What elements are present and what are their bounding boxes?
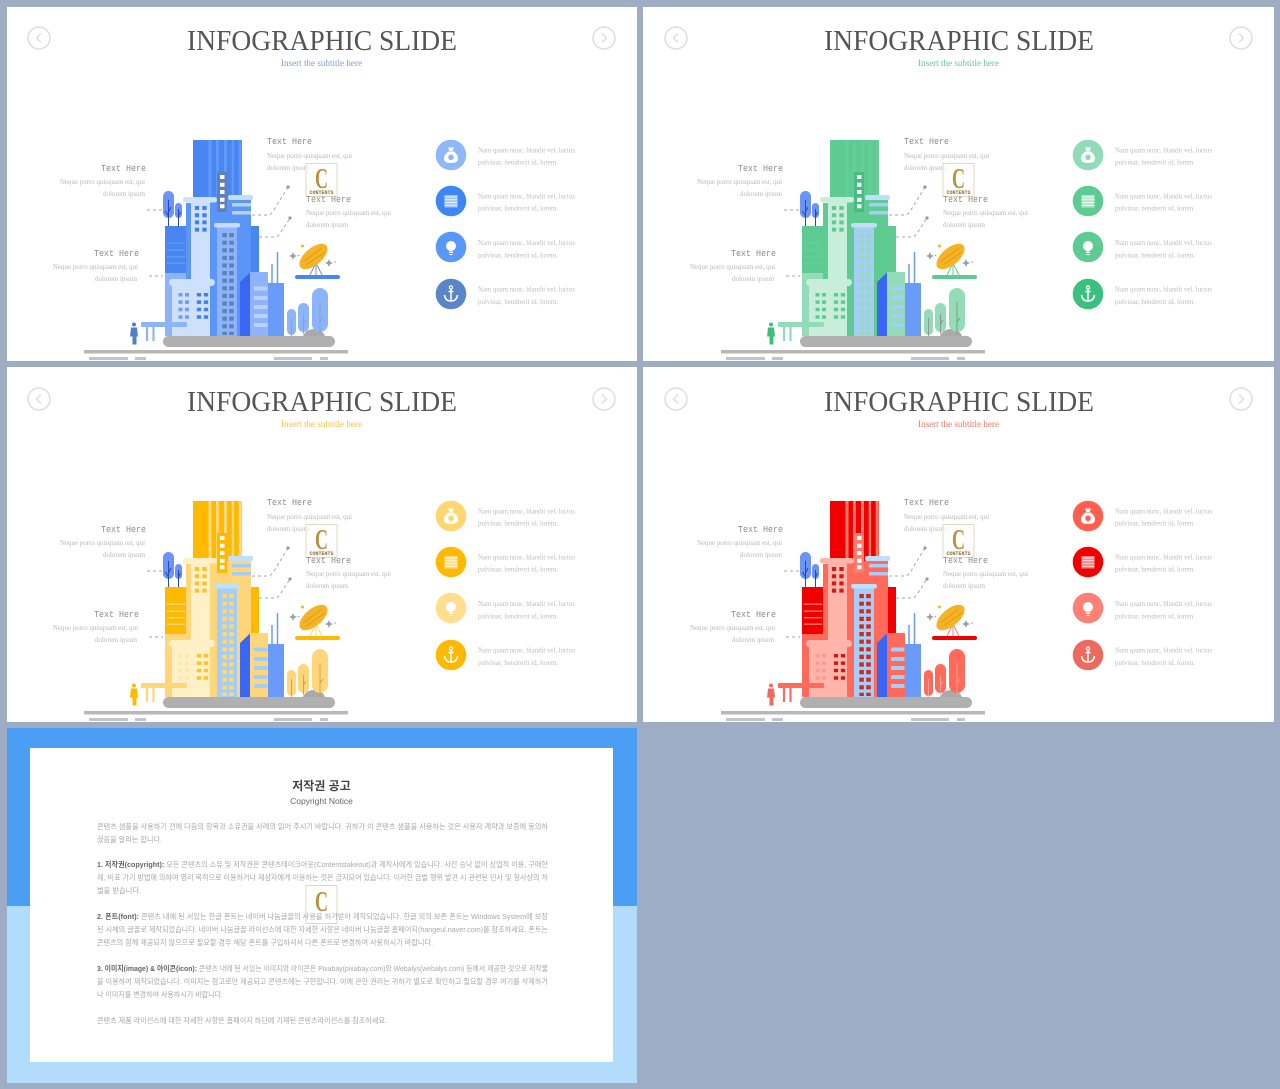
callout: right middle: Neque porro quisquam est, qui [306, 209, 391, 217]
text block: copyright: 벌을 받습니다. [97, 885, 141, 895]
callout: left bottom: Neque porro quisquam est, qui [690, 263, 775, 271]
text block: image and icon: 을 이용하여 제작되었습니다. 이미지는 참고로만 제공되고 콘텐츠에는 구현합니다. 이에 관한 권리는 귀하가 별도로 확인하고 필요할 경우 여기를 삭제하거 [97, 976, 548, 986]
text block: image and icon: 나 이미지를 변경하여 사용하시기 바랍니다. [97, 989, 223, 999]
list item: stack [436, 186, 575, 216]
callout: left bottom: dolorem ipsum [95, 275, 138, 283]
list item: money [1073, 140, 1212, 170]
panel: copyright notice [7, 728, 637, 1083]
watermark logo [306, 886, 337, 924]
text block: image and icon: 3. 이미지(image) & 아이콘(icon): 콘텐츠 내에 된 서있는 이미지와 아이콘은 Pixabay(pixabay.com)와 Webalys(webalys.com) 등에서 제공한 것으로 저작물 [97, 963, 548, 973]
subtitle: Insert the subtitle here [918, 58, 999, 68]
heading: copyright notice: 저작권 공고 [292, 778, 351, 793]
callout: left top: Neque porro quisquam est, qui [697, 539, 782, 547]
callout: left top [60, 525, 146, 559]
callout: left top: Text Here [738, 164, 783, 174]
list item: money: Nam quam nunc, blandit vel, luctus [478, 146, 575, 154]
list item: stack: pulvinar, hendrerit id, lorem. [478, 566, 558, 574]
subtitle: Insert the subtitle here [918, 419, 999, 429]
callout: left top: dolorem ipsum [103, 551, 146, 559]
list item: anchor [436, 640, 575, 670]
list item: bulb [436, 593, 575, 623]
callout: right top [267, 498, 352, 533]
list item: anchor: Nam quam nunc, blandit vel, luctus [1115, 646, 1212, 654]
watermark logo: C [952, 164, 965, 195]
callout: right top: Text Here [904, 498, 949, 508]
callout: left top [697, 525, 783, 559]
list item: bulb: pulvinar, hendrerit id, lorem. [478, 252, 558, 260]
callout: right middle: Text Here [943, 556, 988, 566]
text block: intro [97, 821, 548, 844]
list item: stack: pulvinar, hendrerit id, lorem. [1115, 566, 1195, 574]
list item: money: pulvinar, hendrerit id, lorem. [478, 158, 558, 166]
icon: previous arrow [665, 388, 687, 410]
callout: right middle: dolorem ipsum [943, 221, 986, 229]
list item: bulb: pulvinar, hendrerit id, lorem. [1115, 612, 1195, 620]
callout: left bottom: Neque porro quisquam est, qui [53, 263, 138, 271]
illustration: blue city [84, 140, 348, 360]
panel: red slide [643, 367, 1274, 722]
callout: left top: dolorem ipsum [740, 190, 783, 198]
text block: copyright: 1. 저작권(copyright): 모든 콘텐츠의 소유 및 저작권은 콘텐츠테이크아웃(Contentstakeout)과 제작사에게 있습니다. 사전 승낙 없이 상업적 이용, 구매한 [97, 859, 548, 869]
callout: right top [267, 137, 352, 172]
callout: right top [904, 137, 989, 172]
text block: font [97, 911, 548, 947]
text block: license note: 콘텐츠 제품 라이선스에 대한 자세한 사항은 홈페이지 하단에 기재된 콘텐츠라이선스를 참조하세요. [97, 1015, 387, 1025]
title: INFOGRAPHIC SLIDE [824, 387, 1094, 418]
list item: anchor: pulvinar, hendrerit id, lorem. [478, 298, 558, 306]
list item: bulb: Nam quam nunc, blandit vel, luctus [1115, 600, 1212, 608]
watermark logo [943, 164, 974, 196]
callout: right middle: Text Here [943, 195, 988, 205]
watermark logo: CONTENTS [946, 551, 971, 557]
callout: left bottom: dolorem ipsum [95, 636, 138, 644]
text block: copyright: 제, 비표 가기 방법에 의하여 영리 목적으로 이용하거나 제삼자에게 이용하는 것은 금지되어 있습니다. 이러한 금벌 행위 발견 시 관련된 민사 및 형사상의 처 [97, 872, 548, 882]
list item: anchor [1073, 640, 1212, 670]
text block: intro: 콘텐츠 샘플을 사용하기 전에 다음의 항목과 소유권을 사례의 읽어 주시기 바랍니다. 귀하가 이 콘텐츠 샘플을 사용하는 것은 사용자 계약과 보증에 동의하 [97, 821, 548, 831]
list item: money: Nam quam nunc, blandit vel, luctus [1115, 146, 1212, 154]
list item: anchor [1073, 279, 1212, 309]
callout: right top: Neque porro quisquam est, qui [267, 513, 352, 521]
icon: next arrow [1230, 27, 1252, 49]
icon: previous arrow [28, 27, 50, 49]
callout: right middle: dolorem ipsum [943, 582, 986, 590]
callout: left top: Neque porro quisquam est, qui [60, 539, 145, 547]
text block: copyright [97, 859, 548, 895]
callout: left top: Text Here [101, 164, 146, 174]
list item: bulb: Nam quam nunc, blandit vel, luctus [1115, 239, 1212, 247]
list item: stack [1073, 547, 1212, 577]
watermark logo: C [315, 887, 328, 918]
callout: left bottom [690, 249, 776, 283]
list item: money: Nam quam nunc, blandit vel, luctus [478, 508, 575, 516]
title: INFOGRAPHIC SLIDE [824, 26, 1094, 57]
list item: bulb: pulvinar, hendrerit id, lorem. [478, 612, 558, 620]
illustration: red city [721, 501, 985, 721]
subtitle: Insert the subtitle here [281, 419, 362, 429]
callout: left bottom: dolorem ipsum [732, 275, 775, 283]
list item: stack: Nam quam nunc, blandit vel, luctus [478, 554, 575, 562]
list item: bulb: Nam quam nunc, blandit vel, luctus [478, 600, 575, 608]
callout: left bottom: dolorem ipsum [732, 636, 775, 644]
watermark logo: C [315, 164, 328, 195]
callout: left bottom: Text Here [731, 610, 776, 620]
callout: right top: Neque porro quisquam est, qui [904, 152, 989, 160]
watermark logo [306, 524, 337, 558]
list item: money [1073, 501, 1212, 531]
callout: left top: Neque porro quisquam est, qui [697, 178, 782, 186]
panel: blue slide [7, 7, 637, 361]
callout: left top [60, 164, 146, 198]
list item: money: pulvinar, hendrerit id, lorem. [1115, 520, 1195, 528]
callout: left top: Text Here [738, 525, 783, 535]
callout: right top: dolorem ipsum [904, 164, 947, 172]
text block: intro: 셨음을 알리는 합니다. [97, 835, 162, 844]
callout: left top: dolorem ipsum [740, 551, 783, 559]
subtitle: Insert the subtitle here [281, 58, 362, 68]
list item: stack: pulvinar, hendrerit id, lorem. [478, 204, 558, 212]
callout: right middle: Neque porro quisquam est, qui [943, 209, 1028, 217]
callout: right middle: Neque porro quisquam est, qui [943, 570, 1028, 578]
list item: anchor: Nam quam nunc, blandit vel, luctus [478, 646, 575, 654]
watermark logo: CONTENTS [309, 190, 334, 196]
callout: left bottom: Neque porro quisquam est, qui [53, 624, 138, 632]
callout: left bottom [53, 249, 139, 283]
callout: right top: dolorem ipsum [904, 525, 947, 533]
callout: right top: Text Here [904, 137, 949, 147]
callout: right middle [306, 556, 391, 590]
watermark logo [943, 524, 974, 558]
callout: right middle: dolorem ipsum [306, 221, 349, 229]
callout: right middle [943, 556, 1028, 590]
list item: stack [436, 547, 575, 577]
callout: right middle: Text Here [306, 556, 351, 566]
callout: right top: Neque porro quisquam est, qui [267, 152, 352, 160]
callout: left bottom: Neque porro quisquam est, qui [690, 624, 775, 632]
callout: right middle: Text Here [306, 195, 351, 205]
list item: bulb [1073, 593, 1212, 623]
text block: image and icon [97, 963, 548, 999]
list item: stack: pulvinar, hendrerit id, lorem. [1115, 204, 1195, 212]
icon: next arrow [593, 388, 615, 410]
list item: bulb: pulvinar, hendrerit id, lorem. [1115, 252, 1195, 260]
watermark logo: CONTENTS [946, 190, 971, 196]
callout: right middle: dolorem ipsum [306, 582, 349, 590]
list item: bulb: Nam quam nunc, blandit vel, luctus [478, 239, 575, 247]
list item: anchor: pulvinar, hendrerit id, lorem. [1115, 298, 1195, 306]
icon: previous arrow [28, 388, 50, 410]
text block: font: 콘텐츠의 함께 제공되지 않으므로 필요할 경우 해당 폰트를 구입하셔서 다른 폰트로 변경하여 사용하시기 바랍니다. [97, 937, 433, 947]
callout: left bottom: Text Here [94, 610, 139, 620]
callout: right middle: Neque porro quisquam est, qui [306, 570, 391, 578]
icon: previous arrow [665, 27, 687, 49]
icon: next arrow [593, 27, 615, 49]
callout: right top [904, 498, 989, 533]
list item: money [436, 501, 575, 531]
list item: anchor: Nam quam nunc, blandit vel, luctus [478, 286, 575, 294]
callout: right middle [306, 195, 391, 229]
illustration: green city [721, 140, 985, 360]
list item: bulb [1073, 232, 1212, 262]
text block: font: 2. 폰트(font): 콘텐츠 내에 된 서있는 한글 폰트는 네이버 나눔글꼴의 사용을 허가받아 제작되었습니다. 한글 외의 보존 폰트는 Windows System에 보장 [97, 911, 548, 921]
list item: anchor [436, 279, 575, 309]
heading: copyright notice: Copyright Notice [290, 796, 353, 806]
title: INFOGRAPHIC SLIDE [187, 26, 457, 57]
icon: next arrow [1230, 388, 1252, 410]
list item: bulb [436, 232, 575, 262]
callout: left top: dolorem ipsum [103, 190, 146, 198]
list item: anchor: Nam quam nunc, blandit vel, luctus [1115, 286, 1212, 294]
list item: money: pulvinar, hendrerit id, lorem. [478, 520, 558, 528]
list item: money [436, 140, 575, 170]
panel: yellow slide [7, 367, 637, 722]
callout: left bottom [53, 610, 139, 644]
list item: anchor: pulvinar, hendrerit id, lorem. [478, 659, 558, 667]
callout: right top: Neque porro quisquam est, qui [904, 513, 989, 521]
text block: font: 된 시체의 글꼴로 제작되었습니다. 네이버 나눔글꼴 라이선스에 대한 자세한 사항은 네이버 나눔글꼴 홈페이지(hangeul.naver.com)를 참조하세요. 폰트는 [97, 924, 548, 934]
watermark logo: C [952, 525, 965, 556]
callout: right top: Text Here [267, 137, 312, 147]
callout: left top [697, 164, 783, 198]
watermark logo: C [315, 525, 328, 556]
panel: green slide [643, 7, 1274, 361]
list item: money: Nam quam nunc, blandit vel, luctus [1115, 508, 1212, 516]
heading: copyright notice [290, 778, 353, 806]
watermark logo: CONTENTS [309, 551, 334, 557]
illustration: yellow city [84, 501, 348, 721]
list item: anchor: pulvinar, hendrerit id, lorem. [1115, 659, 1195, 667]
list item: stack [1073, 186, 1212, 216]
callout: right top: Text Here [267, 498, 312, 508]
list item: money: pulvinar, hendrerit id, lorem. [1115, 158, 1195, 166]
callout: left top: Text Here [101, 525, 146, 535]
callout: right top: dolorem ipsum [267, 164, 310, 172]
callout: right top: dolorem ipsum [267, 525, 310, 533]
callout: left bottom [690, 610, 776, 644]
list item: stack: Nam quam nunc, blandit vel, luctus [478, 192, 575, 200]
list item: stack: Nam quam nunc, blandit vel, luctus [1115, 192, 1212, 200]
title: INFOGRAPHIC SLIDE [187, 387, 457, 418]
callout: left bottom: Text Here [94, 249, 139, 259]
callout: left bottom: Text Here [731, 249, 776, 259]
callout: right middle [943, 195, 1028, 229]
callout: left top: Neque porro quisquam est, qui [60, 178, 145, 186]
list item: stack: Nam quam nunc, blandit vel, luctus [1115, 554, 1212, 562]
watermark logo [306, 164, 337, 196]
